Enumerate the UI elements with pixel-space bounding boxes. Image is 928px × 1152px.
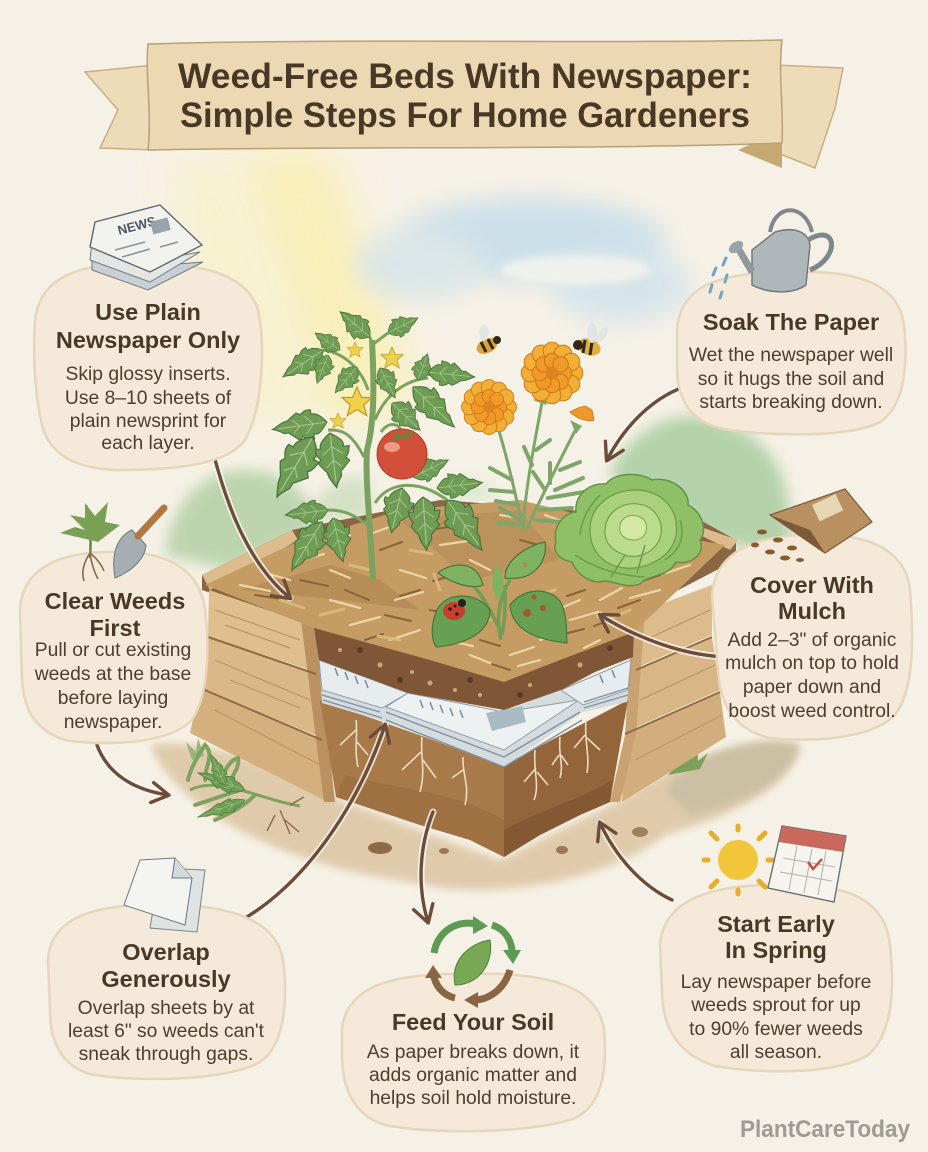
panel: use plain newspaper only xyxy=(34,264,262,470)
lettuce xyxy=(555,474,704,586)
panel: clear weeds first: Clear Weeds xyxy=(45,588,185,614)
panel: clear weeds first: newspaper. xyxy=(64,712,162,733)
panel: cover with mulch: Cover With xyxy=(750,572,874,598)
bees xyxy=(474,323,610,359)
panel: use plain newspaper only: each layer. xyxy=(101,433,195,454)
panel: cover with mulch: Mulch xyxy=(778,598,846,624)
panel: cover with mulch: paper down and xyxy=(743,677,881,698)
panel: start early in spring: all season. xyxy=(730,1042,822,1063)
panel: start early in spring xyxy=(660,885,892,1071)
icon: sun and calendar xyxy=(704,826,846,902)
panel: soak the paper xyxy=(677,272,905,434)
icon: loose paper sheets xyxy=(124,858,205,932)
panel: soak the paper: Wet the newspaper well xyxy=(689,345,893,366)
title banner xyxy=(85,40,843,168)
panel: overlap generously: Generously xyxy=(101,966,231,992)
panel: clear weeds first: weeds at the base xyxy=(34,664,191,685)
newspaper layers xyxy=(319,660,631,767)
panel: clear weeds first: before laying xyxy=(58,688,168,709)
watermark: PlantCareToday xyxy=(740,1116,911,1143)
panel: overlap generously: least 6" so weeds can't xyxy=(68,1021,265,1042)
icon: newspaper stack: NEWS xyxy=(116,213,158,238)
raised wooden bed xyxy=(190,500,738,857)
right wood wall xyxy=(610,585,726,802)
panel: cover with mulch: boost weed control. xyxy=(728,701,896,722)
panel: start early in spring: weeds sprout for up xyxy=(690,995,861,1016)
panel: use plain newspaper only: Skip glossy inserts. xyxy=(65,364,231,385)
panel: soak the paper: Soak The Paper xyxy=(703,309,879,335)
panel: feed your soil: As paper breaks down, it xyxy=(367,1042,580,1063)
panel: use plain newspaper only: Use 8–10 sheets of xyxy=(65,388,232,409)
panel: use plain newspaper only: Use Plain xyxy=(95,299,201,325)
icon: watering can xyxy=(710,210,832,298)
panel: start early in spring: to 90% fewer weeds xyxy=(689,1019,863,1040)
panel: overlap generously xyxy=(48,905,285,1079)
panel: soak the paper: starts breaking down. xyxy=(699,392,883,413)
ground stain xyxy=(150,738,800,890)
panel: overlap generously: Overlap sheets by at xyxy=(78,998,255,1019)
title text: Weed-Free Beds With Newspaper: xyxy=(178,57,752,96)
panel: clear weeds first xyxy=(20,552,207,743)
tomato plant xyxy=(262,303,495,580)
panel: clear weeds first: Pull or cut existing xyxy=(35,640,191,661)
panel: cover with mulch: mulch on top to hold xyxy=(725,653,899,674)
background: watercolor sky, sun rays and bushes xyxy=(165,150,791,570)
icon: mulch bag xyxy=(751,489,872,562)
panel: feed your soil: helps soil hold moisture. xyxy=(370,1088,576,1109)
icon: weed and trowel xyxy=(60,502,164,581)
icon: recycle leaf xyxy=(425,916,521,1008)
panel: use plain newspaper only: Newspaper Only xyxy=(56,327,240,353)
seedling with ladybug xyxy=(432,542,567,647)
marigold plant xyxy=(462,342,594,530)
panel: overlap generously: sneak through gaps. xyxy=(79,1044,253,1065)
panel: cover with mulch xyxy=(712,535,912,740)
panel: soak the paper: so it hugs the soil and xyxy=(698,369,884,390)
bed back rails and interior xyxy=(202,500,738,630)
mulch top xyxy=(205,500,725,682)
panel: clear weeds first: First xyxy=(90,615,141,641)
panel: feed your soil: Feed Your Soil xyxy=(392,1009,554,1035)
panel: overlap generously: Overlap xyxy=(122,939,210,965)
panel: start early in spring: Start Early xyxy=(717,911,835,937)
panel: feed your soil: adds organic matter and xyxy=(369,1065,577,1086)
panel: start early in spring: Lay newspaper before xyxy=(681,972,871,993)
arrows xyxy=(97,385,725,922)
icon: newspaper stack xyxy=(90,205,203,290)
soil cutaway xyxy=(320,700,628,857)
panel: use plain newspaper only: plain newsprint for xyxy=(70,411,227,432)
uprooted weed on the ground xyxy=(188,745,304,834)
title text line 2: Simple Steps For Home Gardeners xyxy=(180,96,750,135)
soil under mulch xyxy=(314,627,634,710)
left wood wall xyxy=(190,590,335,802)
panel: feed your soil xyxy=(342,974,605,1131)
panel: start early in spring: In Spring xyxy=(725,937,827,963)
panel: cover with mulch: Add 2–3" of organic xyxy=(728,630,897,651)
